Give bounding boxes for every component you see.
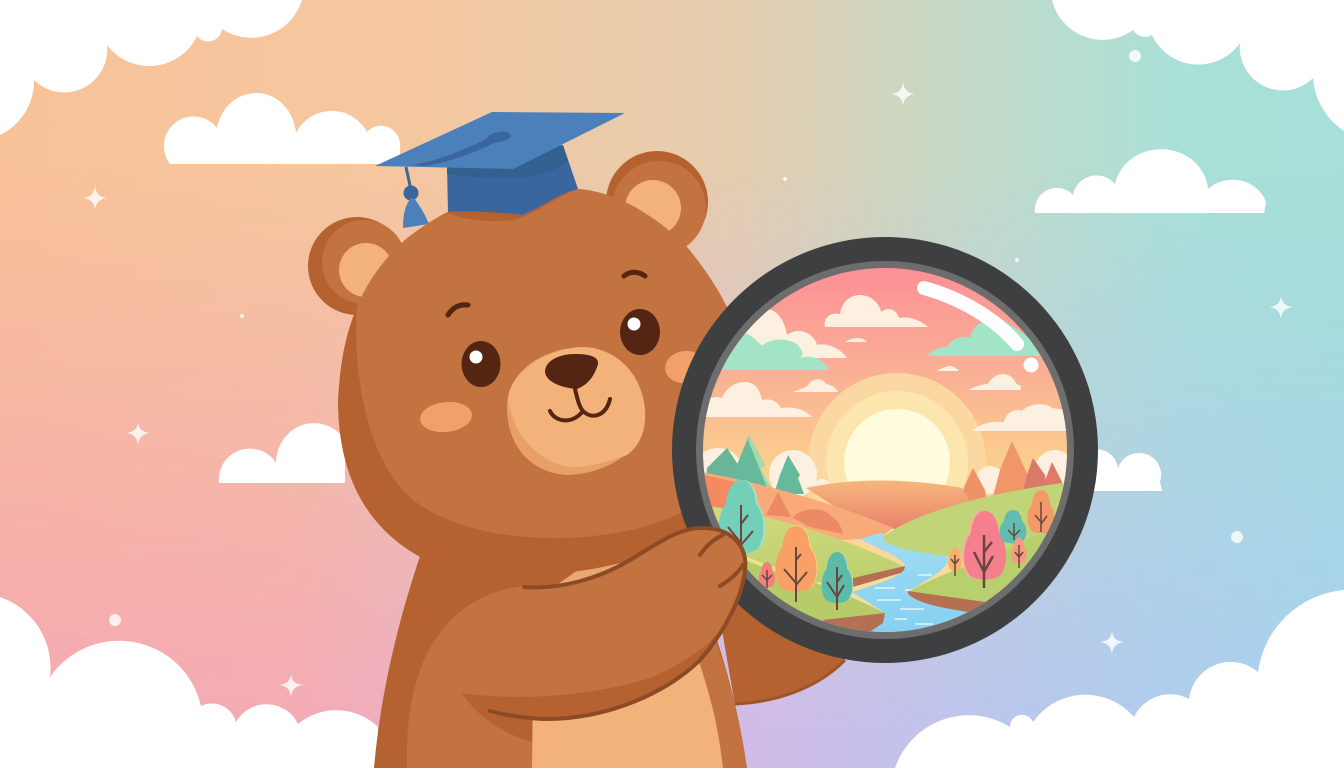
conifers left (705, 435, 804, 494)
river (852, 533, 975, 635)
tree: orange (775, 525, 818, 602)
cloud: upper left (164, 93, 400, 164)
tree: teal front (822, 552, 853, 610)
cloud: upper right (1035, 149, 1266, 213)
tree: pink big (962, 510, 1006, 588)
tree: teal small right (1000, 510, 1026, 543)
graduation cap (375, 112, 625, 228)
lens clouds (692, 295, 1075, 500)
left green hill (712, 506, 904, 583)
left hill brown edge (853, 566, 905, 587)
body right strip (697, 630, 747, 768)
bear (308, 112, 850, 768)
lens highlight (924, 288, 1038, 372)
button and cord (412, 130, 512, 166)
paw finger lines (700, 535, 743, 586)
conifers right (963, 441, 1062, 501)
cloud: mid left behind bear (219, 423, 345, 483)
sun rings (808, 373, 986, 551)
tree: orange right (1028, 490, 1054, 533)
tree: teal left (718, 480, 766, 554)
back arm lower edge (735, 660, 845, 704)
right eyebrow (624, 272, 645, 276)
sky (700, 265, 1070, 635)
far hill (806, 480, 975, 530)
belly (532, 650, 723, 768)
small orange conifer and bush (766, 492, 843, 534)
left eye (462, 341, 500, 387)
left orange hill (700, 472, 893, 540)
corner cloud: bottom right (895, 590, 1344, 768)
lower left green hill (747, 562, 885, 622)
lower left hill stripe (747, 557, 776, 572)
mortarboard (375, 112, 625, 169)
cap band shadow (447, 145, 568, 178)
cap base (447, 145, 578, 215)
left ear (308, 217, 406, 315)
arm shadow (462, 605, 736, 742)
mint clouds (722, 318, 1042, 370)
tree: small pink right (1011, 538, 1027, 568)
left eyebrow (448, 305, 468, 315)
lens scene (692, 265, 1075, 635)
lower right green hill (909, 532, 1047, 603)
back arm behind lens (715, 590, 850, 705)
body (374, 500, 747, 768)
lens inner ring (696, 261, 1074, 639)
mouth (550, 389, 610, 420)
right cheek (663, 348, 707, 386)
head light area (356, 189, 745, 538)
arm fill (407, 528, 745, 768)
magnifying glass (672, 237, 1098, 663)
front arm and paw (407, 528, 745, 768)
sparkles and dots (83, 50, 1293, 697)
lower right brown edge (908, 591, 985, 613)
cloud: mid right behind lens (1090, 449, 1162, 491)
tree: small red (759, 562, 775, 588)
corner cloud: top left (0, 0, 302, 135)
head (338, 189, 752, 575)
right eye (620, 309, 660, 355)
lens frame (672, 237, 1098, 663)
river ripples (875, 575, 933, 624)
muzzle (507, 347, 645, 475)
lower left hill brown edge (823, 613, 885, 632)
corner cloud: top right (1052, 0, 1344, 131)
right green hill (882, 482, 1070, 560)
tree: small orange (948, 547, 962, 576)
left cheek (419, 399, 473, 435)
nose (545, 354, 598, 389)
corner cloud: bottom left (0, 597, 378, 768)
tassel (403, 167, 429, 228)
right ear (606, 151, 708, 255)
arm outline (490, 528, 745, 719)
chest peek (558, 561, 630, 585)
